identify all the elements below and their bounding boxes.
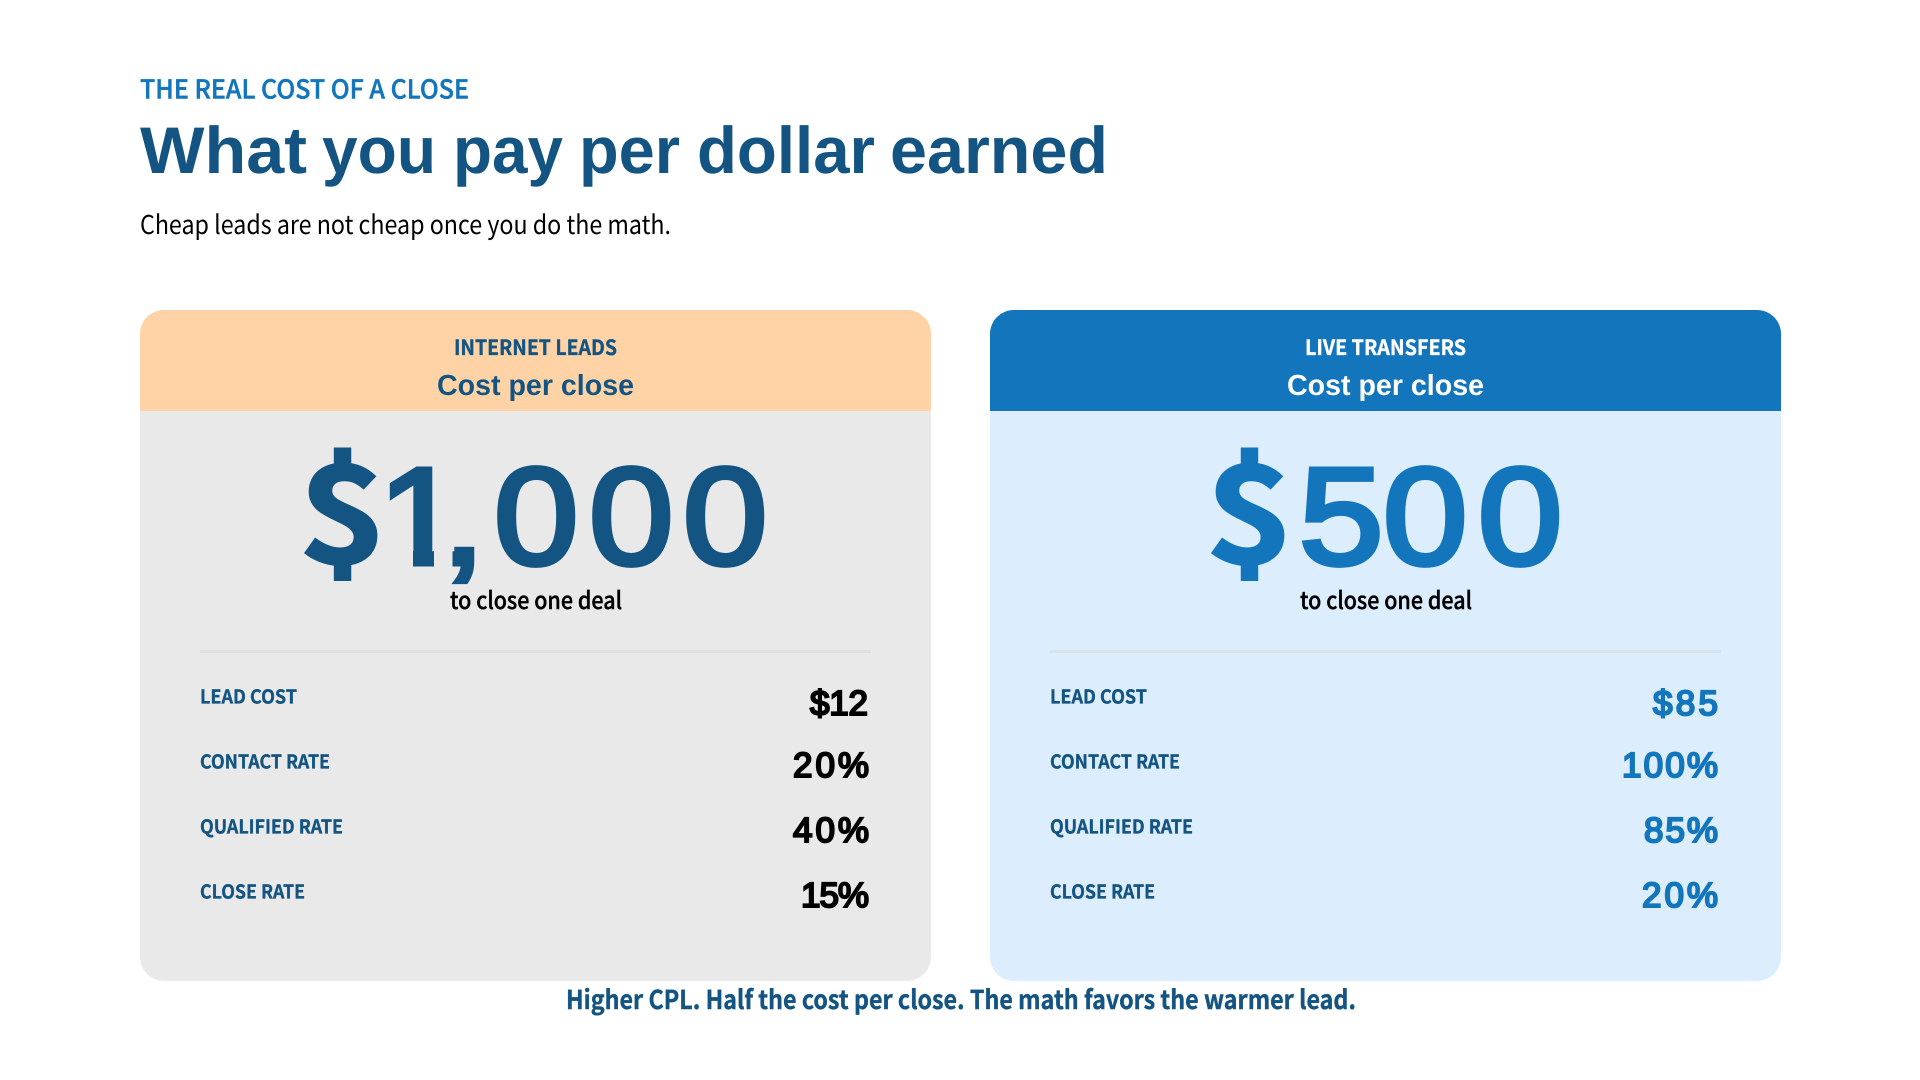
big number: $	[299, 406, 386, 602]
row: lead cost: LEAD COST	[1050, 682, 1147, 710]
row: qualified rate	[1050, 811, 1718, 850]
title: earned	[890, 113, 1108, 187]
row: close rate: CLOSE RATE	[200, 878, 305, 904]
row: qualified rate: QUALIFIED RATE	[1050, 812, 1193, 840]
panel background	[990, 310, 1781, 981]
row: lead cost	[1050, 682, 1718, 723]
row: contact rate: 20%	[793, 746, 869, 785]
row: close rate	[200, 876, 869, 915]
title: dollar	[697, 113, 875, 187]
title: you	[322, 113, 436, 187]
row: contact rate: CONTACT RATE	[1050, 748, 1180, 774]
header subtitle: Cost per close	[437, 370, 634, 402]
panel header	[140, 310, 931, 411]
title: pay	[453, 113, 563, 187]
big number: 500	[1299, 440, 1562, 594]
row: close rate	[1050, 876, 1718, 915]
row: contact rate	[200, 746, 869, 785]
header label: LIVE TRANSFERS	[1305, 332, 1466, 362]
row: contact rate	[1050, 746, 1718, 785]
row: qualified rate: 40%	[793, 811, 869, 850]
big number: $	[1206, 406, 1293, 602]
row: close rate: CLOSE RATE	[1050, 878, 1155, 904]
row: contact rate: CONTACT RATE	[200, 748, 330, 774]
row: qualified rate: 85%	[1644, 811, 1718, 850]
row: close rate: 15%	[801, 876, 869, 915]
row: contact rate: 100%	[1622, 746, 1718, 785]
row: qualified rate: QUALIFIED RATE	[200, 812, 343, 840]
big number: 1,000	[378, 440, 767, 594]
header subtitle: Cost per close	[1287, 370, 1484, 402]
panel: live transfers	[990, 310, 1781, 981]
title: What	[140, 113, 307, 187]
row: lead cost: $12	[810, 684, 868, 723]
row: lead cost: $85	[1653, 684, 1718, 723]
big number caption: to close one deal	[450, 581, 622, 616]
panel: internet leads	[140, 310, 931, 981]
eyebrow: THE REAL COST OF A CLOSE	[140, 70, 469, 106]
panel background	[140, 310, 931, 981]
subtitle: Cheap leads are not cheap once you do the math.	[140, 205, 671, 242]
row: lead cost: LEAD COST	[200, 682, 297, 710]
title: per	[579, 113, 680, 187]
header label: INTERNET LEADS	[454, 332, 617, 362]
big number caption: to close one deal	[1300, 581, 1472, 616]
takeaway: Higher CPL. Half the cost per close. The math favors the warmer lead.	[566, 980, 1356, 1017]
row: qualified rate	[200, 811, 869, 850]
panel header	[990, 310, 1781, 411]
row: close rate: 20%	[1642, 876, 1718, 915]
row: lead cost	[200, 682, 868, 723]
